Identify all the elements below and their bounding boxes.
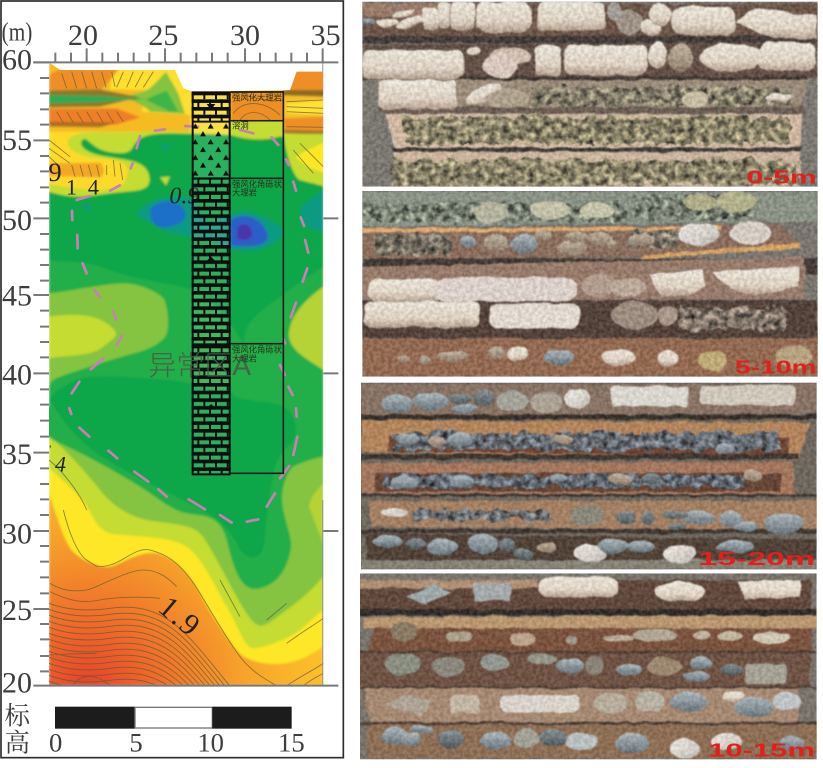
contour value labels: 1 4: [66, 174, 102, 199]
top axis values: [68, 19, 341, 52]
left axis values: 40: [2, 359, 32, 392]
left axis values: 35: [2, 438, 32, 471]
anomaly boundary dashed line: [69, 126, 308, 523]
panel frame: [1, 1, 343, 758]
contour value labels: 1.9: [152, 589, 208, 644]
left axis values: 20: [2, 667, 32, 700]
left axis values: [2, 43, 32, 700]
contour value labels: 9: [48, 157, 62, 187]
top axis values: 20: [68, 19, 98, 52]
scale bar: 0: [49, 728, 62, 758]
unit label: (m): [2, 18, 32, 47]
contour lines: [49, 72, 324, 685]
depth label 0-5m: 0-5m: [747, 166, 817, 187]
scale bar: 10: [197, 728, 224, 758]
contour map: [49, 63, 324, 685]
top axis values: 25: [148, 19, 178, 52]
depth label 5-10m: 5-10m: [735, 356, 817, 377]
stratum label: brecciated marble lower: 强风化角砾状: [232, 345, 282, 355]
photo: core tray 5-10m: [362, 191, 818, 377]
contour value labels: ,: [49, 439, 52, 450]
scale bar: [49, 707, 305, 758]
photo: core tray 15-20m: [361, 383, 817, 569]
borehole lithology column: [192, 92, 231, 475]
stratum label: brecciated marble lower: 大理岩: [232, 353, 257, 363]
depth label 15-20m: 15-20m: [698, 548, 815, 569]
scale bar: 5: [129, 728, 143, 758]
stratum label: karst cave: 溶洞: [232, 121, 249, 131]
scale bar: 15: [278, 728, 305, 758]
photo: core tray 10-15m: [360, 573, 817, 761]
axes and ticks: [33, 48, 338, 686]
strata description box: [231, 92, 283, 473]
left panel: resistivity section with borehole: [1, 1, 343, 768]
left axis values: 55: [2, 124, 32, 157]
tray rows: [362, 3, 818, 39]
contour value labels: [48, 157, 208, 644]
depth label 10-15m: 10-15m: [708, 740, 815, 761]
elevation label: 标: [5, 703, 31, 731]
elevation label: 高: [5, 729, 30, 757]
left axis values: 60: [2, 43, 32, 76]
stratum label: brecciated marble upper: 强风化角砾状: [232, 179, 282, 189]
left axis values: 30: [2, 517, 32, 550]
top axis values: 35: [311, 19, 341, 52]
stratum label: strongly weathered marble: 强风化大理岩: [232, 93, 282, 103]
stratum label: brecciated marble upper: 大理岩: [232, 188, 257, 198]
left axis values: 25: [2, 594, 32, 627]
contour value labels: 4: [55, 452, 66, 477]
photo: core tray 0-5m: [362, 2, 818, 187]
top axis values: 30: [230, 19, 260, 52]
left axis values: 50: [2, 204, 32, 237]
anomaly label: 异常区A: [148, 350, 251, 381]
elevation label: [5, 703, 31, 757]
contour value labels: 0.9: [169, 183, 199, 209]
axis numbers: [2, 18, 341, 700]
left axis values: 45: [2, 280, 32, 313]
